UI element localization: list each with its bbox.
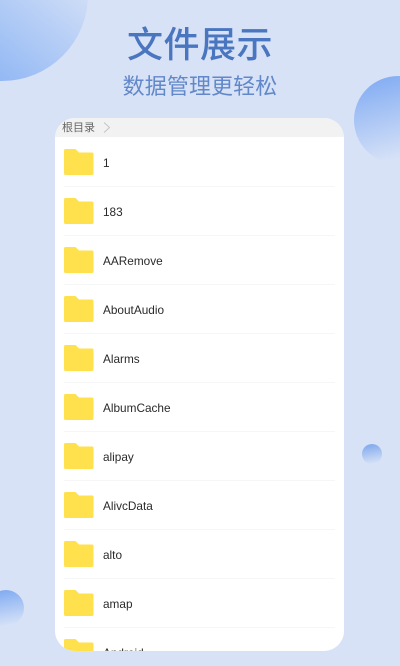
file row: AARemove: [64, 247, 335, 285]
file row: alipay: [64, 443, 335, 481]
decorative circle: small right: [362, 444, 382, 464]
breadcrumb bar: [55, 118, 344, 137]
file row: alipay: alipay: [103, 450, 134, 464]
panel: file list: [55, 118, 344, 651]
file row: amap: amap: [103, 597, 133, 611]
file row: 1: [64, 149, 335, 187]
icon: chevron: [104, 122, 110, 133]
breadcrumb text: 根目录: [62, 122, 95, 134]
file row: alto: alto: [103, 548, 122, 562]
file row: Android (cut off): [64, 639, 144, 651]
file row: amap: [64, 590, 335, 628]
file row: AlbumCache: AlbumCache: [103, 401, 171, 415]
file row: 183: 183: [103, 205, 123, 219]
file row: AlivcData: [64, 492, 335, 530]
title: 文件展示: [127, 24, 273, 65]
file row: AARemove: AARemove: [103, 254, 163, 268]
file row: 183: [64, 198, 335, 236]
decorative circle: top left: [0, 0, 88, 81]
subtitle: 数据管理更轻松: [123, 74, 277, 99]
file row: Alarms: [64, 345, 335, 383]
file row: AlbumCache: [64, 394, 335, 432]
decorative circle: right: [354, 76, 400, 164]
file row: AlivcData: AlivcData: [103, 499, 153, 513]
decorative circle: bottom left: [0, 590, 24, 626]
file row: 1: 1: [103, 156, 110, 170]
file row: AboutAudio: AboutAudio: [103, 303, 164, 317]
file row: Alarms: Alarms: [103, 352, 140, 366]
file row: AboutAudio: [64, 296, 335, 334]
file row: alto: [64, 541, 335, 579]
